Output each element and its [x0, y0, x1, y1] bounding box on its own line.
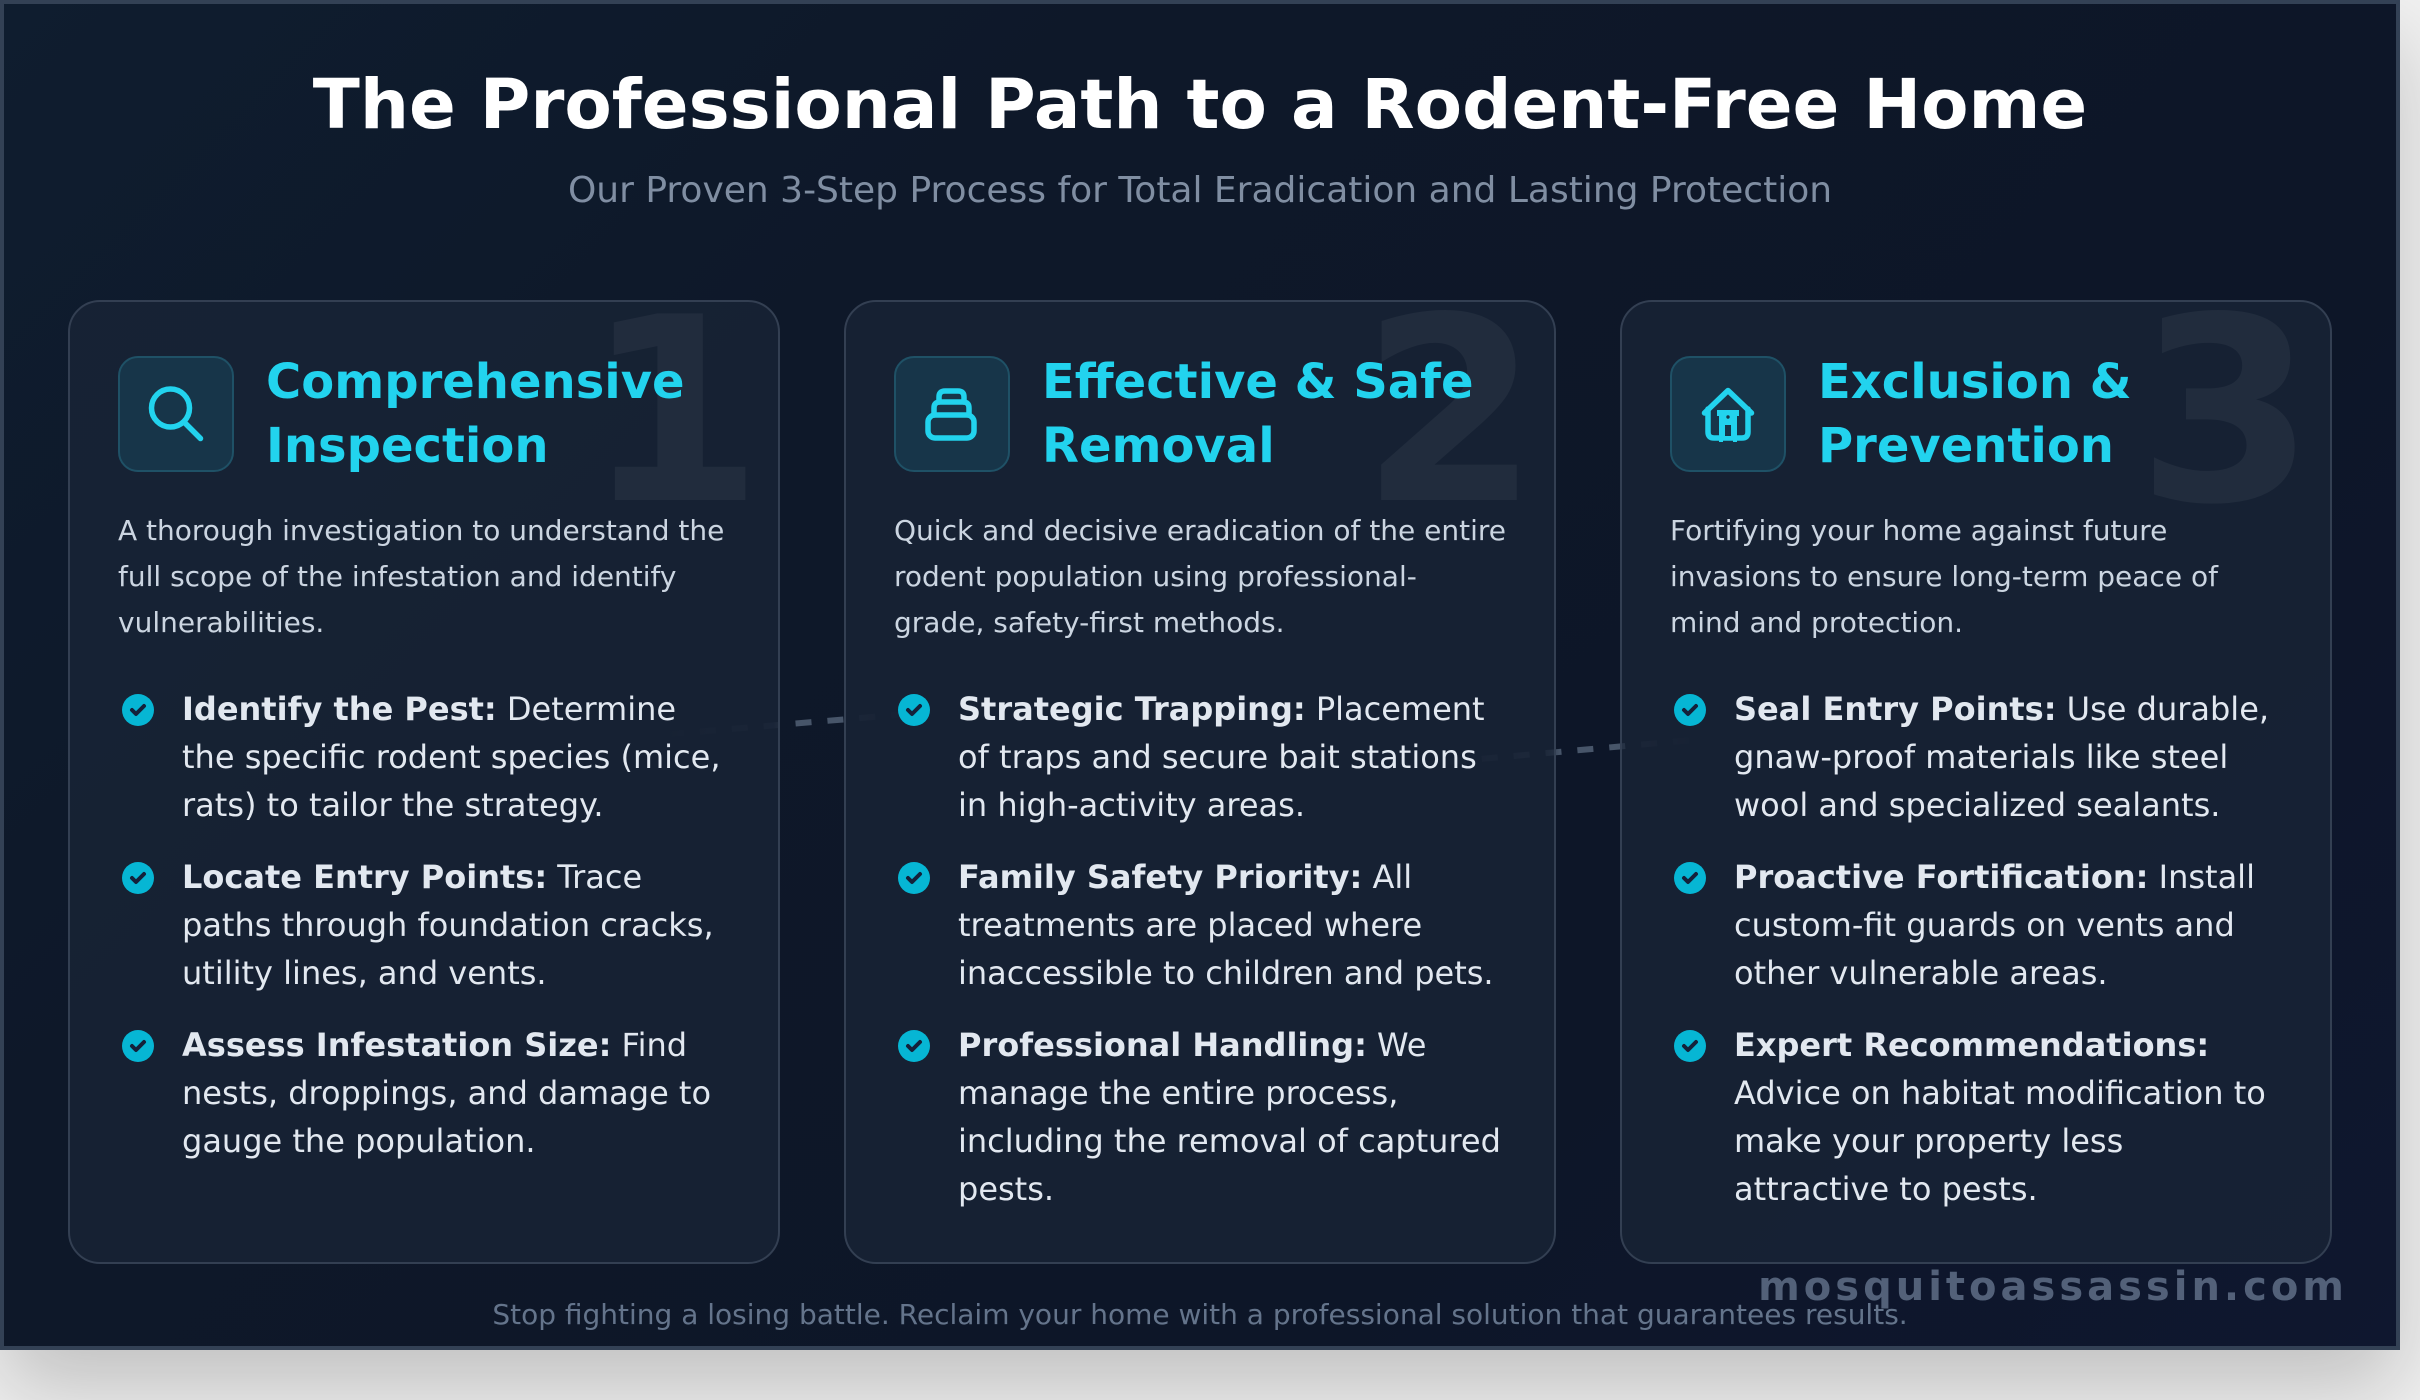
- check icon: [898, 862, 930, 894]
- icon: bait container: [894, 356, 1010, 472]
- description: [118, 514, 724, 639]
- list item: [1734, 690, 2269, 824]
- list item: gauge the population.: [182, 1122, 536, 1160]
- check icon: [122, 1030, 154, 1062]
- list item: wool and specialized sealants.: [1734, 786, 2220, 824]
- heading: Comprehensive: [266, 354, 685, 410]
- list item: Identify the Pest: Determine: [182, 690, 676, 728]
- heading: [1818, 354, 2132, 474]
- heading: Effective & Safe: [1042, 354, 1474, 410]
- list item: make your property less: [1734, 1122, 2123, 1160]
- list item: [182, 690, 720, 824]
- description: [1670, 514, 2218, 639]
- heading: Removal: [1042, 418, 1275, 474]
- list item: Locate Entry Points: Trace: [182, 858, 642, 896]
- list item: [958, 690, 1485, 824]
- list item: utility lines, and vents.: [182, 954, 547, 992]
- panel: step 1 inspection: [68, 300, 780, 1264]
- list item: Professional Handling: We: [958, 1026, 1426, 1064]
- list item: Proactive Fortification: Install: [1734, 858, 2255, 896]
- list item: of traps and secure bait stations: [958, 738, 1477, 776]
- heading: Inspection: [266, 418, 549, 474]
- heading: Exclusion &: [1818, 354, 2132, 410]
- panel: step 2 removal: [844, 300, 1556, 1264]
- list item: including the removal of captured: [958, 1122, 1501, 1160]
- list item: custom-fit guards on vents and: [1734, 906, 2235, 944]
- description: Fortifying your home against future: [1670, 514, 2167, 547]
- description: vulnerabilities.: [118, 606, 324, 639]
- list item: Advice on habitat modification to: [1734, 1074, 2266, 1112]
- list item: [182, 1026, 711, 1160]
- list item: [958, 1026, 1501, 1208]
- description: [894, 514, 1506, 639]
- list item: attractive to pests.: [1734, 1170, 2038, 1208]
- footer tagline: Stop fighting a losing battle. Reclaim your home with a professional solution that guarantees results.: [492, 1298, 1908, 1331]
- heading: Prevention: [1818, 418, 2114, 474]
- list item: [1734, 858, 2255, 992]
- list item: rats) to tailor the strategy.: [182, 786, 604, 824]
- subtitle: Our Proven 3-Step Process for Total Eradication and Lasting Protection: [568, 170, 1832, 211]
- list item: Strategic Trapping: Placement: [958, 690, 1485, 728]
- description: grade, safety-first methods.: [894, 606, 1284, 639]
- check icon: [122, 694, 154, 726]
- title: The Professional Path to a Rodent-Free Home: [313, 65, 2087, 145]
- description: rodent population using professional-: [894, 560, 1417, 593]
- list item: in high-activity areas.: [958, 786, 1305, 824]
- description: full scope of the infestation and identify: [118, 560, 676, 593]
- icon: house: [1670, 356, 1786, 472]
- list item: manage the entire process,: [958, 1074, 1398, 1112]
- list item: Expert Recommendations:: [1734, 1026, 2209, 1064]
- check icon: [1674, 862, 1706, 894]
- check icon: [1674, 1030, 1706, 1062]
- check icon: [898, 694, 930, 726]
- check icon: [1674, 694, 1706, 726]
- list item: paths through foundation cracks,: [182, 906, 714, 944]
- description: invasions to ensure long-term peace of: [1670, 560, 2218, 593]
- list item: gnaw-proof materials like steel: [1734, 738, 2228, 776]
- check icon: [898, 1030, 930, 1062]
- description: mind and protection.: [1670, 606, 1963, 639]
- heading: [1042, 354, 1474, 474]
- description: Quick and decisive eradication of the entire: [894, 514, 1506, 547]
- list item: the specific rodent species (mice,: [182, 738, 720, 776]
- check icon: [122, 862, 154, 894]
- panel: step 3 prevention: [1620, 300, 2332, 1264]
- list item: pests.: [958, 1170, 1054, 1208]
- list item: Assess Infestation Size: Find: [182, 1026, 687, 1064]
- description: A thorough investigation to understand the: [118, 514, 724, 547]
- icon: magnifying glass: [118, 356, 234, 472]
- list item: [1734, 1026, 2266, 1208]
- list item: nests, droppings, and damage to: [182, 1074, 711, 1112]
- list item: [958, 858, 1494, 992]
- list item: inaccessible to children and pets.: [958, 954, 1494, 992]
- list item: treatments are placed where: [958, 906, 1422, 944]
- list item: [182, 858, 714, 992]
- list item: Family Safety Priority: All: [958, 858, 1412, 896]
- list item: other vulnerable areas.: [1734, 954, 2108, 992]
- heading: [266, 354, 685, 474]
- watermark url: mosquitoassassin.com: [1758, 1264, 2348, 1310]
- list item: Seal Entry Points: Use durable,: [1734, 690, 2269, 728]
